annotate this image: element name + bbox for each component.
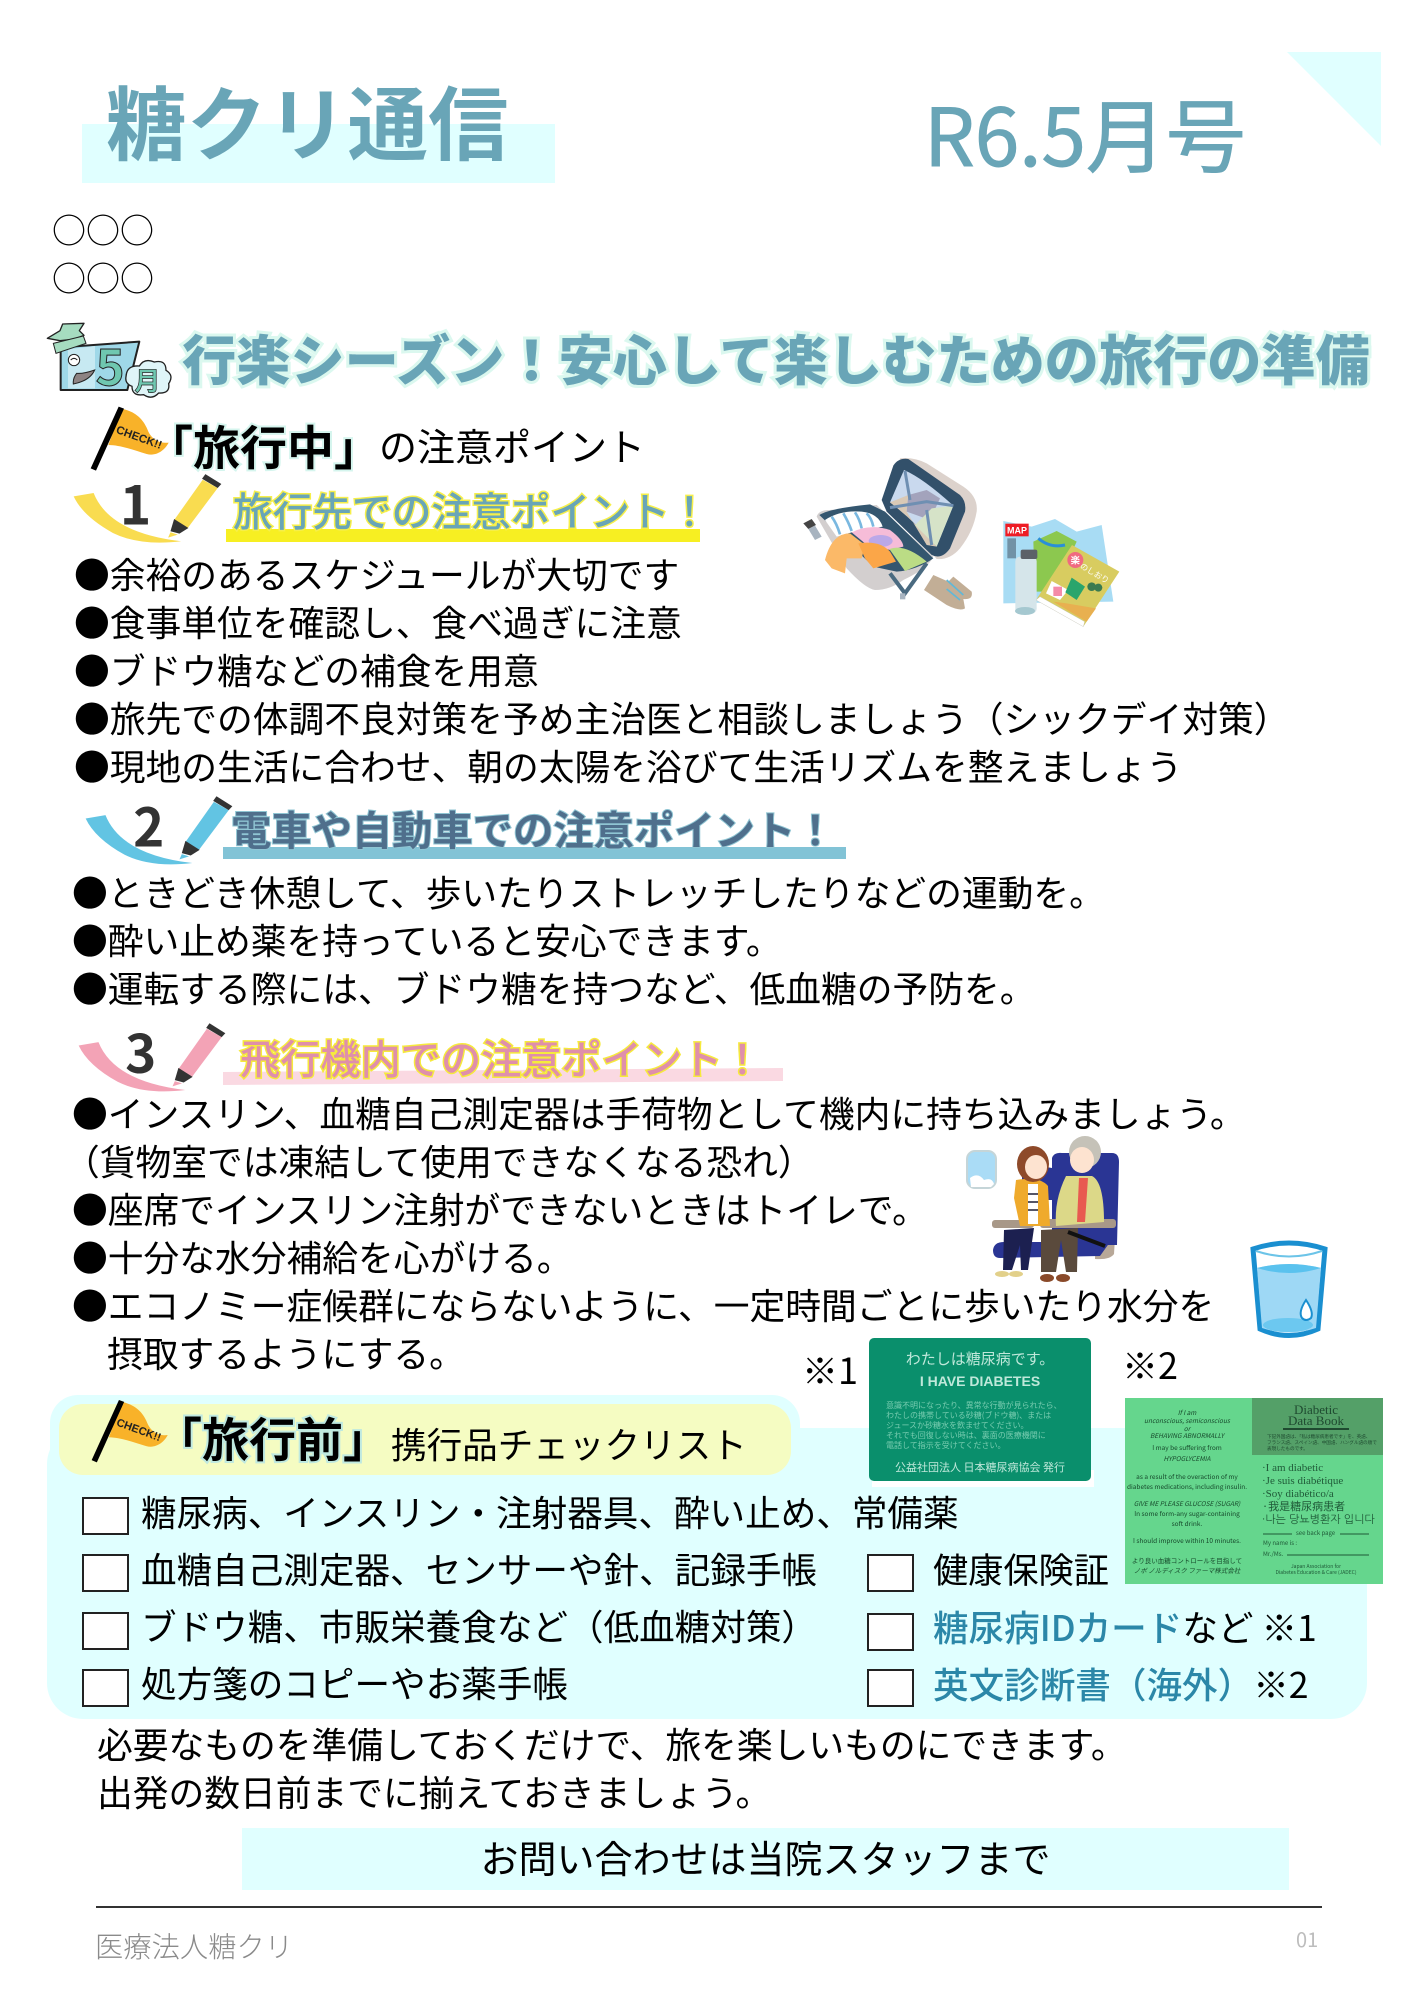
list: on the plane [64, 1087, 1246, 1378]
section header: during travel [90, 406, 645, 479]
list: train and car: ●運転する際には、ブドウ糖を持つなど、低血糖の予防を。 [72, 962, 1035, 1013]
diabetes ID card: それでも回復しない時は、裏面の医療機関に [886, 1430, 1046, 1441]
english diagnosis card: 表現したものです。 [1267, 1445, 1308, 1452]
diabetes ID card: ジュースか砂糖水を飲ませてください。 [886, 1420, 1029, 1431]
blue highlight band [223, 847, 846, 859]
list: on the plane: ●インスリン、血糖自己測定器は手荷物として機内に持ち込みましょう。 [72, 1087, 1246, 1138]
list: on the plane: ●十分な水分補給を心がける。 [72, 1231, 572, 1282]
heading text: 「旅行前」 [155, 1402, 390, 1471]
footer rule [96, 1906, 1322, 1908]
checklist header [59, 1404, 791, 1475]
placeholder name lines [52, 204, 154, 301]
english diagnosis card: unconscious, semiconscious [1144, 1415, 1231, 1425]
illustration: map, bottle and guidebook [1003, 519, 1120, 627]
checklist right column [867, 1543, 1317, 1709]
list: train and car [72, 866, 1105, 1013]
placeholder name lines: ○○○ [52, 204, 154, 253]
page number: 01 [1296, 1924, 1318, 1953]
diabetes ID card: わたしは糖尿病です。 [906, 1348, 1054, 1369]
list: train and car: ●ときどき休憩して、歩いたりストレッチしたりなどの運動を。 [72, 866, 1105, 917]
icon: May calendar [46, 322, 172, 400]
english diagnosis card: ·나는 당뇨병환자 입니다 [1262, 1513, 1375, 1525]
illustration: map, bottle and guidebook: のしおり [1078, 561, 1111, 586]
list: at the destination: ●食事単位を確認し、食べ過ぎに注意 [74, 596, 682, 647]
english diagnosis card: ·Je suis diabétique [1262, 1475, 1343, 1487]
english diagnosis card: 下記外国語は、「私は糖尿病患者です」を、英語、 [1267, 1433, 1370, 1440]
list: on the plane: 摂取するようにする。 [107, 1327, 465, 1378]
list: at the destination: ●ブドウ糖などの補食を用意 [74, 644, 539, 695]
yellow highlight band [226, 529, 700, 542]
placeholder name lines: ○○○ [52, 252, 154, 301]
list: at the destination: ●現地の生活に合わせ、朝の太陽を浴びて生活リズムを整えましょう [74, 740, 1182, 791]
title: 糖クリ通信 [106, 62, 508, 178]
icon: check flag: CHECK!! [115, 1417, 163, 1444]
list: on the plane: （貨物室では凍結して使用できなくなる恐れ） [64, 1135, 814, 1186]
checklist right column: 英文診断書（海外）※2 [933, 1658, 1309, 1709]
list: at the destination [74, 548, 1290, 791]
icon: check flag: CHECK!! [114, 424, 163, 452]
checklist tab background [50, 1395, 800, 1485]
english diagnosis card: ·I am diabetic [1262, 1462, 1323, 1474]
heading text: 「旅行中」 [146, 410, 381, 479]
heading suffix: の注意ポイント [379, 417, 645, 472]
pink highlight band [223, 1068, 783, 1085]
english diagnosis card: My name is : [1263, 1538, 1297, 1547]
illustration: map, bottle and guidebook: MAP [1007, 525, 1027, 535]
illustration: map, bottle and guidebook: 楽 [1071, 553, 1081, 567]
checklist right column: 糖尿病IDカードなど ※1 [933, 1601, 1317, 1652]
diabetes ID card: I HAVE DIABETES [920, 1373, 1040, 1389]
english diagnosis card: より良い血糖コントロールを目指して [1132, 1555, 1242, 1565]
diabetes ID card: 公益社団法人 日本糖尿病協会 発行 [895, 1459, 1065, 1475]
icon: May calendar: 5 [95, 329, 125, 400]
illustration: glass of water [1250, 1240, 1328, 1338]
checklist left column: 糖尿病、インスリン・注射器具、酔い止め、常備薬 [141, 1486, 959, 1537]
english diagnosis card: BEHAVING ABNORMALLY [1150, 1430, 1226, 1440]
english diagnosis card: If I am [1178, 1407, 1197, 1417]
english diagnosis card: Mr./Ms. [1263, 1549, 1284, 1558]
diabetes ID card: 意識不明になったり、異常な行動が見られたら、 [886, 1400, 1062, 1411]
english diagnosis card: diabetes medications, including insulin. [1127, 1481, 1247, 1491]
contact banner: お問い合わせは当院スタッフまで [480, 1829, 1050, 1884]
english diagnosis card: I may be suffering from [1152, 1442, 1222, 1452]
checklist left column [82, 1486, 959, 1708]
checklist left column: 処方箋のコピーやお薬手帳 [141, 1657, 568, 1708]
english diagnosis card: soft drink. [1172, 1518, 1203, 1528]
icon: check flag [90, 406, 169, 471]
checklist left column: ブドウ糖、市販栄養食など（低血糖対策） [141, 1600, 817, 1651]
closing message [97, 1718, 1127, 1817]
list: train and car: ●酔い止め薬を持っていると安心できます。 [72, 914, 782, 965]
checklist panel background [47, 1428, 1367, 1719]
english diagnosis card: フランス語、スペイン語、中国語、ハングル語の順で [1267, 1439, 1377, 1446]
english diagnosis card: Diabetes Education & Care (JADEC) [1275, 1569, 1357, 1576]
diabetes ID card [869, 1338, 1091, 1481]
english diagnosis card: or [1184, 1423, 1192, 1433]
english diagnosis card: as a result of the overaction of my [1136, 1471, 1238, 1481]
english diagnosis card: In some form-any sugar-containing [1134, 1508, 1240, 1518]
list: on the plane: ●エコノミー症候群にならないように、一定時間ごとに歩いたり水分を [72, 1279, 1214, 1330]
english diagnosis card: Diabetic [1294, 1402, 1338, 1417]
issue date: R6.5月号 [924, 74, 1246, 190]
illustration: couple in airplane seats [966, 1136, 1119, 1282]
icon: May calendar: 月 [134, 362, 160, 399]
sub heading 2: 電車や自動車での注意ポイント！ [231, 798, 835, 857]
english diagnosis card: GIVE ME PLEASE GLUCOSE (SUGAR) [1134, 1498, 1241, 1508]
white backing under ID card [872, 1470, 1094, 1487]
closing message: 必要なものを準備しておくだけで、旅を楽しいものにできます。 [97, 1718, 1127, 1769]
heading suffix: 携行品チェックリスト [391, 1418, 747, 1469]
english diagnosis card: HYPOGLYCEMIA [1163, 1453, 1211, 1463]
english diagnosis card: ·Soy diabético/a [1262, 1488, 1334, 1500]
english diagnosis card: Data Book [1288, 1413, 1344, 1428]
checklist right column: 健康保険証 [933, 1543, 1109, 1594]
closing message: 出発の数日前までに揃えておきましょう。 [97, 1766, 771, 1817]
title band [82, 124, 555, 183]
english diagnosis card: ·我是糖尿病患者 [1262, 1498, 1345, 1514]
english diagnosis card: ノボ ノルディスク ファーマ株式会社 [1134, 1565, 1242, 1575]
english diagnosis card [1125, 1398, 1383, 1584]
english diagnosis card: Japan Association for [1291, 1563, 1341, 1570]
main heading: 行楽シーズン！安心して楽しむための旅行の準備 [182, 317, 1370, 396]
english diagnosis card: I should improve within 10 minutes. [1133, 1535, 1241, 1545]
list: at the destination: ●旅先での体調不良対策を予め主治医と相談しましょう（シックデイ対策） [74, 692, 1290, 743]
icon: check flag [92, 1400, 168, 1462]
list: at the destination: ●余裕のあるスケジュールが大切です [74, 548, 679, 599]
list: on the plane: ●座席でインスリン注射ができないときはトイレで。 [72, 1183, 928, 1234]
sub heading 3: 飛行機内での注意ポイント！ [240, 1027, 762, 1086]
diabetes ID card: わたしの携帯している砂糖(ブドウ糖)、または [886, 1410, 1051, 1421]
marker icon 1 [74, 473, 222, 543]
footnote mark 1: ※1 [802, 1343, 858, 1395]
contact banner [242, 1828, 1289, 1890]
decorative corner triangle [1287, 52, 1381, 146]
diabetes ID card: 電話して指示を受けてください。 [886, 1440, 1006, 1451]
footer clinic name: 医療法人糖クリ [95, 1925, 293, 1966]
english diagnosis card: see back page [1296, 1528, 1336, 1537]
illustration: open suitcase [803, 458, 977, 610]
checklist left column: 血糖自己測定器、センサーや針、記録手帳 [141, 1543, 817, 1594]
marker icon 3 [78, 1022, 226, 1092]
footnote mark 2: ※2 [1122, 1338, 1178, 1390]
sub heading 1: 旅行先での注意ポイント！ [233, 481, 709, 538]
marker icon 2 [86, 795, 232, 864]
